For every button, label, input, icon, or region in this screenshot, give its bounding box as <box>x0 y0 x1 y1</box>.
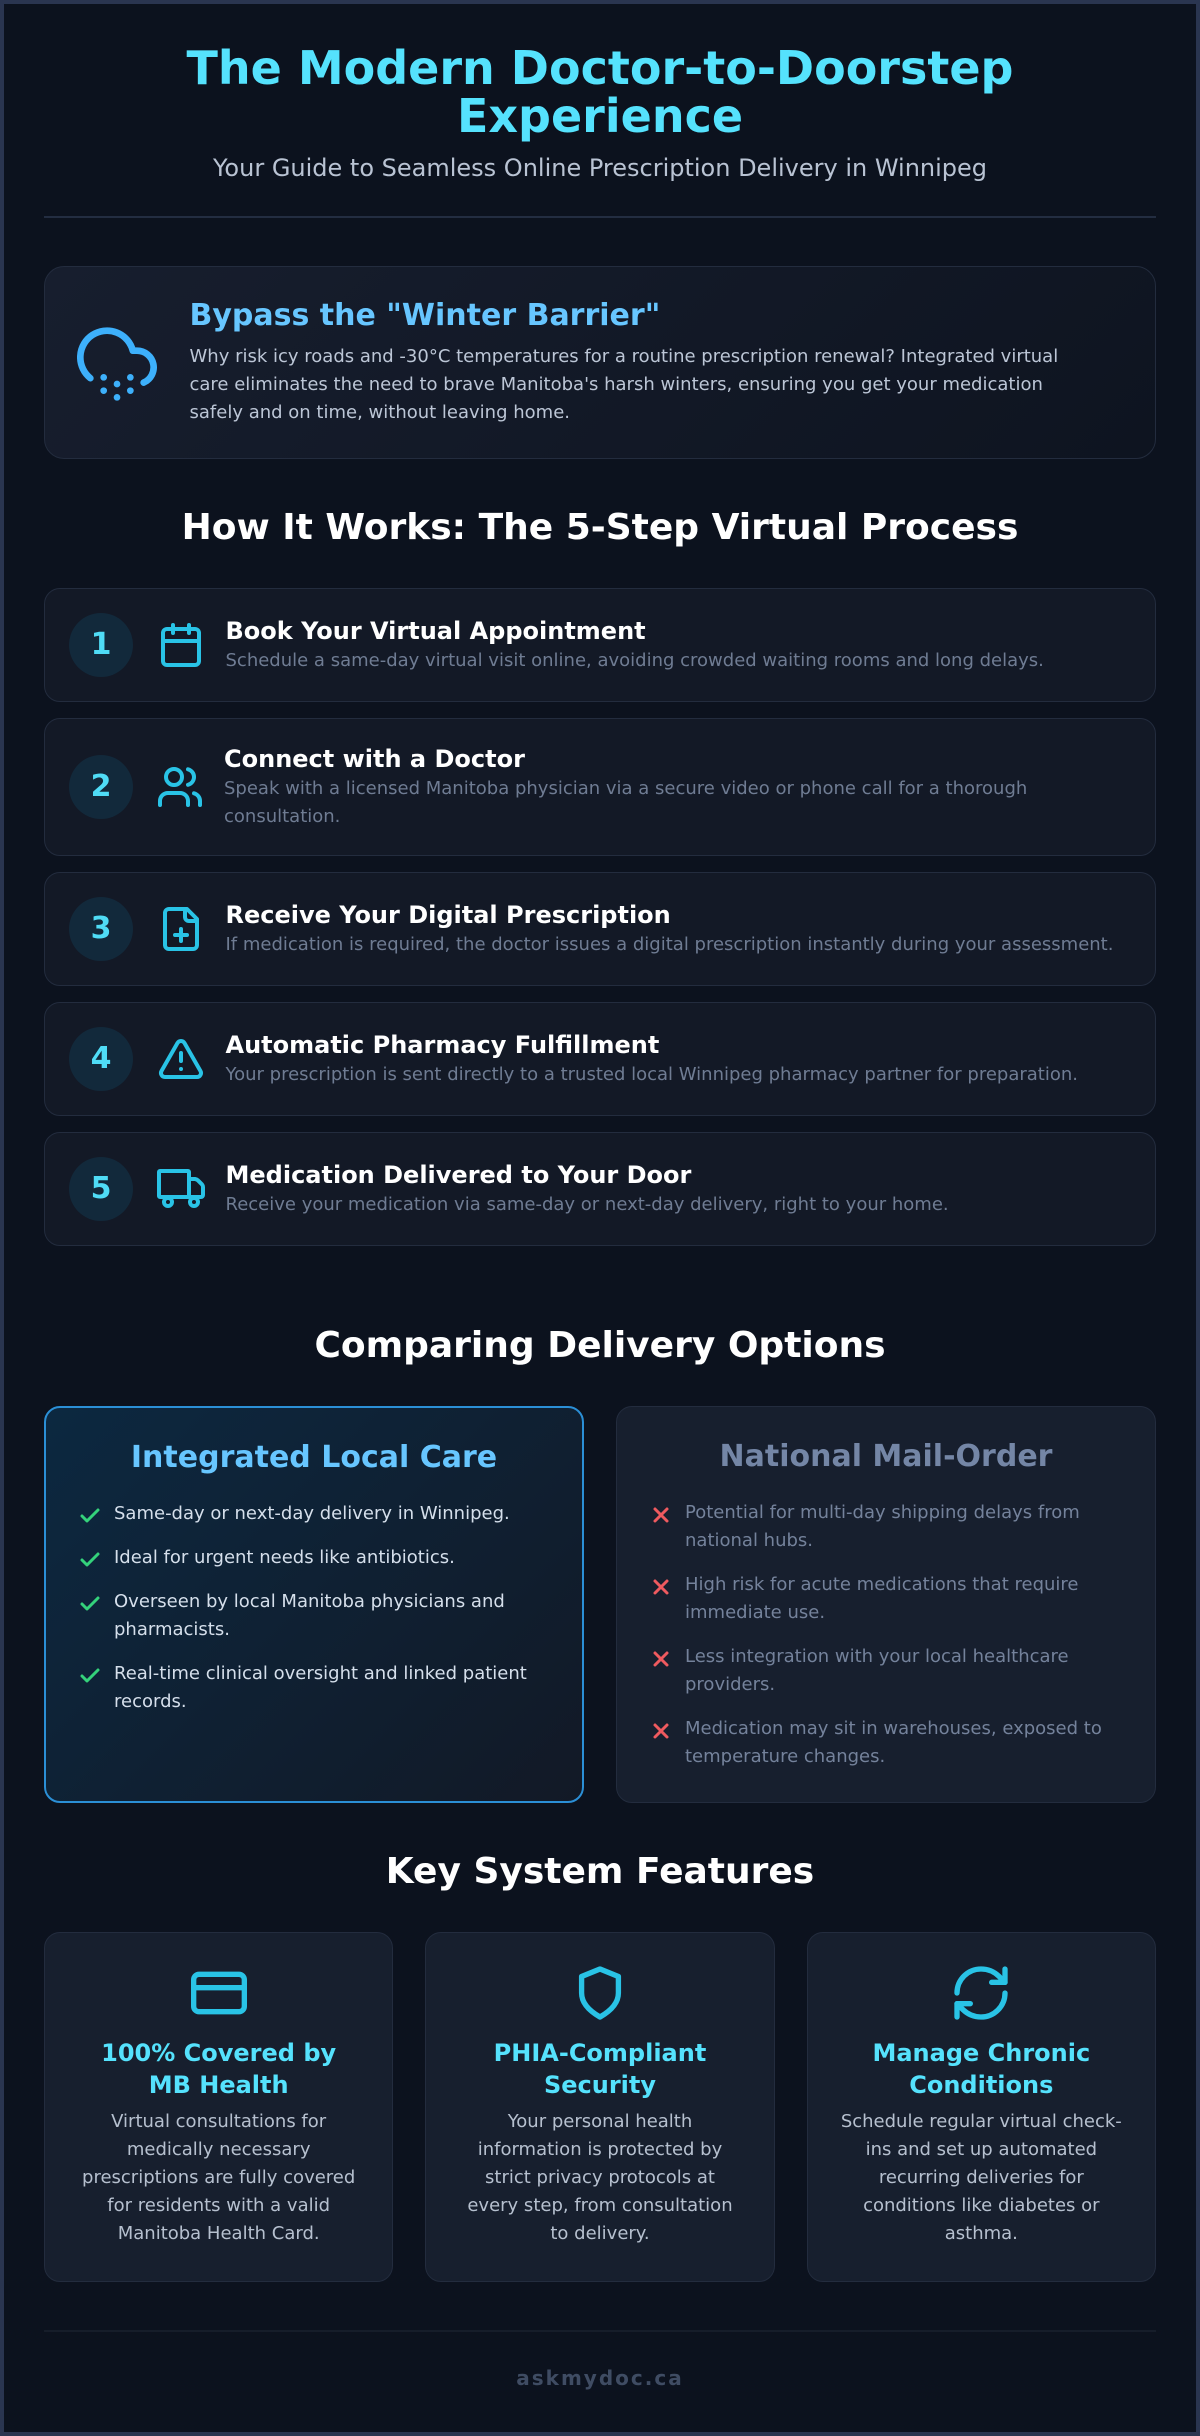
feature 2 text: to delivery. <box>550 2223 650 2244</box>
feature 2 text: every step, from consultation <box>467 2195 733 2216</box>
number 1: 1 <box>91 627 111 662</box>
feature 2 text: Your personal health <box>508 2111 692 2132</box>
step 4 title: Automatic Pharmacy Fulfillment <box>226 1031 659 1059</box>
check 2 <box>80 1552 100 1567</box>
step 4 <box>44 1002 1156 1116</box>
icon: file plus <box>163 907 199 951</box>
feature 1 heading: MB Health <box>149 2071 289 2099</box>
icon: alert triangle <box>158 1039 203 1079</box>
heading: key system features: Key System Features <box>386 1851 814 1892</box>
feature 1 text <box>82 2111 355 2244</box>
check 3 <box>80 1596 100 1611</box>
step 2 description: Speak with a licensed Manitoba physician via a secure video or phone call for a thorough <box>224 778 1027 799</box>
feature 1 text: prescriptions are fully covered <box>82 2167 355 2188</box>
drawback 3 <box>685 1646 1069 1695</box>
benefit 4 <box>114 1663 527 1712</box>
step 2 description: consultation. <box>224 806 340 827</box>
feature 1 text: for residents with a valid <box>107 2195 330 2216</box>
feature 2 heading: PHIA-Compliant <box>494 2039 706 2067</box>
subtitle: Your Guide to Seamless Online Prescription Delivery in Winnipeg <box>213 154 987 182</box>
title: Experience <box>457 89 743 143</box>
feature 3 text: recurring deliveries for <box>879 2167 1084 2188</box>
feature: chronic conditions <box>807 1932 1156 2282</box>
footer: askmydoc.ca <box>516 2366 684 2390</box>
integrated heading: Integrated Local Care <box>131 1440 497 1475</box>
step 2 <box>44 718 1156 856</box>
number 2 <box>69 755 133 819</box>
drawback 4: Medication may sit in warehouses, exposed to <box>685 1718 1102 1739</box>
winter heading: Bypass the "Winter Barrier" <box>190 298 660 333</box>
step 1 description: Schedule a same-day virtual visit online, avoiding crowded waiting rooms and long delays. <box>226 650 1044 671</box>
feature 3 text <box>841 2111 1122 2244</box>
benefit 3 <box>114 1591 505 1640</box>
number 3 <box>69 897 133 961</box>
step 3 description: If medication is required, the doctor issues a digital prescription instantly during your assessment. <box>226 934 1113 955</box>
number 5 <box>69 1157 133 1221</box>
panel: winter barrier <box>44 266 1156 459</box>
drawback 2 <box>685 1574 1078 1623</box>
list: national drawbacks <box>653 1502 1102 1767</box>
icon: calendar <box>161 623 201 667</box>
feature 2 text: information is protected by <box>478 2139 722 2160</box>
feature 2 text <box>467 2111 733 2244</box>
step 5 title: Medication Delivered to Your Door <box>226 1161 691 1189</box>
cross 4 <box>653 1723 669 1739</box>
drawback 1: Potential for multi-day shipping delays from <box>685 1502 1080 1523</box>
heading: comparing delivery options: Comparing Delivery Options <box>314 1325 886 1366</box>
number 2: 2 <box>91 769 111 804</box>
feature 3 text: ins and set up automated <box>866 2139 1097 2160</box>
number 1 <box>69 613 133 677</box>
title: The Modern Doctor-to-Doorstep <box>187 41 1013 95</box>
icon: refresh <box>954 1966 1008 2020</box>
cross 3 <box>653 1651 669 1667</box>
step 2 description <box>224 778 1027 827</box>
winter body text: Why risk icy roads and -30°C temperatures for a routine prescription renewal? Integrated virtual <box>190 346 1058 367</box>
drawback 3: Less integration with your local healthcare <box>685 1646 1069 1667</box>
step 5 description: Receive your medication via same-day or next-day delivery, right to your home. <box>226 1194 949 1215</box>
feature: PHIA security <box>425 1932 775 2282</box>
benefit 4: Real-time clinical oversight and linked patient <box>114 1663 527 1684</box>
feature 1 text: Manitoba Health Card. <box>118 2223 320 2244</box>
icon: truck <box>157 1169 205 1208</box>
benefit 3: Overseen by local Manitoba physicians and <box>114 1591 505 1612</box>
feature: MB Health coverage <box>44 1932 393 2282</box>
number 4 <box>69 1027 133 1091</box>
feature 1 heading: 100% Covered by <box>101 2039 336 2067</box>
benefit 1: Same-day or next-day delivery in Winnipeg. <box>114 1503 510 1524</box>
step 3 title: Receive Your Digital Prescription <box>226 901 671 929</box>
drawback 1 <box>685 1502 1080 1551</box>
heading: how it works: How It Works: The 5-Step Virtual Process <box>182 507 1018 548</box>
feature 3 heading: Manage Chronic <box>872 2039 1090 2067</box>
number 4: 4 <box>91 1041 111 1076</box>
drawback 4 <box>685 1718 1102 1767</box>
drawback 2: immediate use. <box>685 1602 825 1623</box>
step 2 title: Connect with a Doctor <box>224 745 525 773</box>
feature 3 heading: Conditions <box>909 2071 1053 2099</box>
drawback 4: temperature changes. <box>685 1746 885 1767</box>
step 4 description: Your prescription is sent directly to a trusted local Winnipeg pharmacy partner for preparation. <box>226 1064 1078 1085</box>
title <box>186 41 1013 143</box>
drawback 2: High risk for acute medications that require <box>685 1574 1078 1595</box>
panel: integrated local care <box>44 1406 584 1803</box>
winter body text <box>190 346 1058 423</box>
step 3 <box>44 872 1156 986</box>
feature 1 heading <box>101 2039 336 2099</box>
step 1 <box>44 588 1156 702</box>
winter body text: safely and on time, without leaving home. <box>190 402 570 423</box>
feature 2 heading: Security <box>544 2071 656 2099</box>
number 5: 5 <box>91 1171 111 1206</box>
check 1 <box>80 1508 100 1523</box>
number 3: 3 <box>91 911 111 946</box>
feature 3 text: conditions like diabetes or <box>863 2195 1100 2216</box>
national heading: National Mail-Order <box>720 1439 1052 1474</box>
benefit 3: pharmacists. <box>114 1619 230 1640</box>
panel: national mail-order <box>616 1406 1156 1803</box>
check 4 <box>80 1668 100 1683</box>
drawback 1: national hubs. <box>685 1530 813 1551</box>
cross 2 <box>653 1579 669 1595</box>
benefit 4: records. <box>114 1691 187 1712</box>
step 5 <box>44 1132 1156 1246</box>
cross 1 <box>653 1507 669 1523</box>
feature 2 heading <box>494 2039 706 2099</box>
feature 1 text: medically necessary <box>127 2139 310 2160</box>
list: integrated benefits <box>80 1503 527 1712</box>
feature 1 text: Virtual consultations for <box>111 2111 326 2132</box>
winter body text: care eliminates the need to brave Manitoba's harsh winters, ensuring you get your medication <box>190 374 1043 395</box>
feature 3 text: asthma. <box>945 2223 1018 2244</box>
benefit 2: Ideal for urgent needs like antibiotics. <box>114 1547 455 1568</box>
feature 3 heading <box>872 2039 1090 2099</box>
feature 2 text: strict privacy protocols at <box>485 2167 715 2188</box>
icon: cloud with snow <box>77 327 157 401</box>
step 1 title: Book Your Virtual Appointment <box>226 617 646 645</box>
feature 3 text: Schedule regular virtual check- <box>841 2111 1122 2132</box>
icon: users <box>158 767 202 807</box>
icon: credit card <box>191 1972 247 2014</box>
drawback 3: providers. <box>685 1674 775 1695</box>
icon: shield <box>578 1966 622 2020</box>
